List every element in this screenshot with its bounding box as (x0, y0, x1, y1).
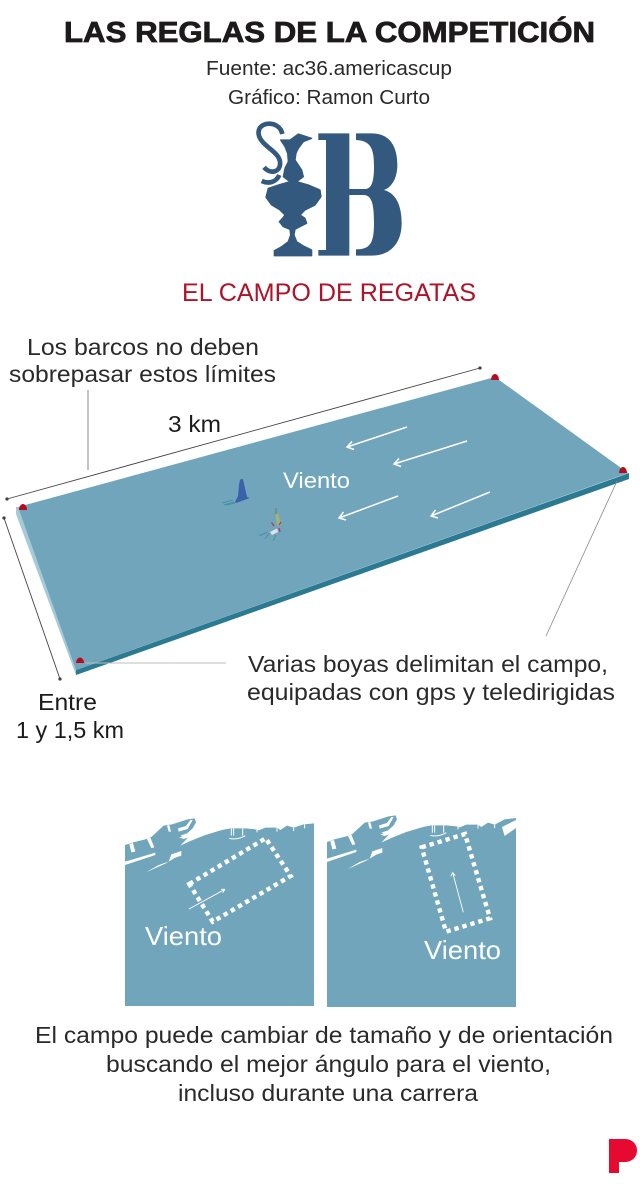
section heading: EL CAMPO DE REGATAS (182, 279, 476, 307)
label: limits: sobrepasar estos límites (9, 361, 276, 387)
leader: buoy bottom (85, 662, 226, 664)
caption: El campo puede cambiar de tamaño y de orientación (35, 1022, 613, 1048)
wind label: Viento (424, 935, 501, 965)
label: 3 km: 3 km (168, 411, 221, 437)
caption: buscando el mejor ángulo para el viento, (106, 1051, 551, 1077)
label: width: 1 y 1,5 km (16, 717, 124, 743)
boat: yellow (259, 508, 281, 541)
label: limits (9, 334, 276, 387)
label: width: Entre (38, 689, 97, 715)
boat: blue (222, 479, 250, 505)
buoys (19, 374, 627, 663)
dimension line: length (6, 367, 481, 500)
label: buoys (247, 651, 615, 705)
caption (35, 1022, 613, 1106)
dimension line: width (3, 517, 61, 680)
title: LAS REGLAS DE LA COMPETICIÓN (64, 15, 595, 49)
leader: buoy right (546, 481, 617, 636)
source credit: Gráfico: Ramon Curto (228, 87, 430, 109)
label: buoys: Varias boyas delimitan el campo, (248, 651, 608, 677)
label: limits: Los barcos no deben (27, 334, 259, 360)
wind arrows (339, 427, 490, 520)
wind label: Viento (145, 921, 222, 951)
source credit (206, 58, 452, 109)
publisher logo (609, 1139, 637, 1173)
logo: trophy and B (259, 124, 402, 256)
leader: limits (87, 390, 89, 470)
caption: incluso durante una carrera (178, 1080, 478, 1106)
source credit: Fuente: ac36.americascup (206, 58, 452, 80)
wind label: Viento (283, 468, 350, 493)
race course plate (16, 374, 629, 675)
label: width (16, 689, 124, 743)
map panel: wind upward (327, 815, 516, 1007)
map panel: wind sideways (125, 818, 314, 1006)
label: buoys: equipadas con gps y teledirigidas (247, 679, 615, 705)
